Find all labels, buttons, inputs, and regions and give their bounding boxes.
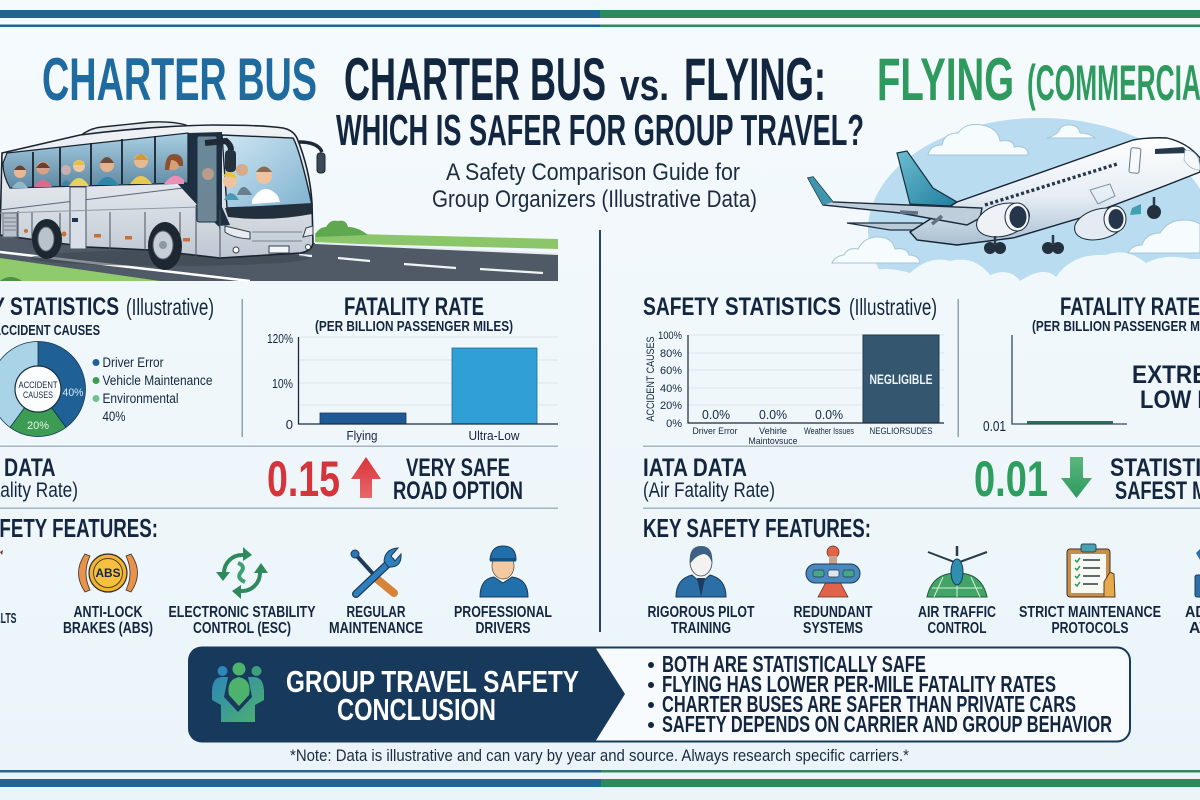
heading: charter bus: CHARTER BUS: [42, 46, 317, 113]
bottom border stripes: [0, 770, 1200, 787]
feature: strict maintenance protocols: [1019, 544, 1161, 637]
feature: air traffic control: AIR TRAFFIC: [918, 604, 996, 621]
donut chart: accident causes: 20%: [27, 420, 49, 432]
heading: flying safety statistics: STATISTICS: [725, 293, 841, 321]
bar chart: flying accident causes: 0.0%: [702, 408, 730, 422]
legend: accident causes: Driver Error: [102, 355, 164, 370]
feature: rigorous pilot training: [648, 546, 755, 637]
bar chart: bus fatality rate: 120%: [267, 331, 293, 346]
bar chart: flying accident causes: Vehirle: [759, 426, 787, 436]
heading: flying safety statistics: (Illustrative): [849, 294, 937, 320]
feature: rigorous pilot training: TRAINING: [671, 620, 731, 637]
feature: anti-lock brakes: BRAKES (ABS): [63, 620, 153, 637]
feature: anti-lock brakes: ANTI-LOCK: [74, 604, 143, 621]
footnote: *Note: Data is illustrative and can vary by year and source. Always research specific carriers.*: [290, 746, 909, 765]
bar chart: bus fatality rate: 0: [286, 417, 293, 432]
legend: accident causes: Vehicle Maintenance: [102, 373, 212, 388]
heading: flying key safety features: KEY SAFETY FEATURES:: [643, 513, 871, 543]
feature: professional drivers: [454, 546, 552, 637]
heading: flying: FLYING: [877, 46, 1014, 113]
bar chart: flying accident causes: 80%: [660, 348, 682, 360]
bar chart: flying fatality rate: 0.01: [983, 418, 1006, 435]
text block: conclusion bullets: [648, 651, 1112, 737]
feature: seat belts: [0, 550, 16, 627]
heading: bus fatality rate: (PER BILLION PASSENGER MILES): [315, 318, 513, 335]
bar chart: flying accident causes: 100%: [658, 330, 682, 342]
banner: conclusion heading: CONCLUSION: [337, 692, 496, 727]
stat: air fatality rate 0.01: 0.01: [974, 451, 1048, 507]
subtitle: [432, 159, 757, 213]
callout: very safe road option: VERY SAFE: [406, 454, 510, 482]
text block: conclusion bullets: BOTH ARE STATISTICALLY SAFE: [662, 651, 926, 677]
feature: strict maintenance protocols: STRICT MAINTENANCE: [1019, 604, 1161, 621]
feature: electronic stability control: [168, 547, 316, 637]
bar chart: flying accident causes: ACCIDENT CAUSES: [645, 336, 657, 422]
illustration: sky and clouds: [831, 118, 1200, 281]
bar chart: flying accident causes: 20%: [660, 400, 682, 412]
bar chart: flying accident causes: Weather Issues: [804, 426, 854, 436]
feature: air traffic control: [918, 546, 996, 637]
data source: bus: DATA: [4, 454, 56, 482]
heading: bus safety statistics: [0, 293, 214, 321]
heading: flying: [877, 46, 1200, 113]
illustration: road scene: [0, 221, 558, 281]
passengers: [12, 154, 184, 188]
feature: redundant systems: REDUNDANT: [794, 604, 873, 621]
heading: flying safety statistics: SAFETY: [643, 293, 719, 321]
callout: extremely low risk: [1132, 361, 1200, 414]
text block: conclusion bullets: FLYING HAS LOWER PER-MILE FATALITY RATES: [662, 671, 1056, 697]
title: FLYING:: [684, 46, 826, 113]
bar chart: flying accident causes: Maintovsuce: [748, 436, 798, 446]
door window: [197, 136, 217, 222]
bar chart: bus fatality rate: Ultra-Low: [468, 428, 520, 443]
heading: bus fatality rate: FATALITY RATE: [344, 293, 484, 321]
top border stripes: [0, 10, 1200, 27]
banner: conclusion heading: GROUP TRAVEL SAFETY: [286, 664, 579, 699]
feature: regular maintenance: REGULAR: [346, 604, 406, 621]
data source: air: (Air Fatality Rate): [643, 479, 775, 502]
banner: conclusion heading: [189, 647, 625, 742]
legend: accident causes: 40%: [102, 409, 126, 424]
feature: anti-lock brakes: ABS: [96, 568, 121, 580]
feature: professional drivers: DRIVERS: [476, 620, 531, 637]
bar chart: bus fatality rate: 10%: [272, 376, 293, 391]
heading: bus fatality rate: [315, 293, 513, 335]
bar chart: flying accident causes: NEGLIORSUDES: [870, 426, 932, 436]
illustration: airplane: [808, 138, 1200, 254]
feature: professional drivers: PROFESSIONAL: [454, 604, 552, 621]
title: [336, 46, 864, 155]
stat: bus fatality rate 0.15: 0.15: [267, 451, 340, 507]
centre divider: [599, 230, 601, 632]
bar chart: flying accident causes: Driver Error: [692, 426, 738, 436]
feature: regular maintenance: [329, 548, 423, 637]
bar chart: flying accident causes: 0.0%: [815, 408, 843, 422]
data source: air: IATA DATA: [643, 454, 747, 482]
bar chart: flying accident causes: 60%: [660, 365, 682, 377]
wheels: [32, 219, 62, 259]
bar chart: flying accident causes: 0%: [666, 418, 682, 430]
bar chart: flying accident causes: 0.0%: [759, 408, 787, 422]
bar chart: flying accident causes: [645, 330, 944, 446]
feature: redundant systems: SYSTEMS: [803, 620, 863, 637]
donut chart: accident causes: [0, 322, 100, 436]
feature: anti-lock brakes: [63, 554, 153, 637]
callout: statistically safest mode: [1110, 454, 1200, 505]
title: vs.: [620, 61, 669, 110]
callout: very safe road option: ROAD OPTION: [393, 477, 523, 505]
callout: very safe road option: [393, 454, 523, 505]
bar chart: flying fatality rate: [983, 335, 1127, 435]
arrow: down: [1061, 457, 1092, 498]
feature: advanced avionics: [1185, 549, 1200, 637]
donut chart: accident causes: ACCIDENT: [18, 380, 58, 391]
heading: flying fatality rate: [1032, 293, 1200, 335]
bar chart: bus fatality rate: [267, 331, 558, 443]
legend: accident causes: Environmental: [102, 391, 178, 406]
feature: regular maintenance: MAINTENANCE: [329, 620, 423, 637]
panel: conclusion: [189, 647, 1130, 742]
subtitle: Group Organizers (Illustrative Data): [432, 186, 757, 213]
donut chart: accident causes: CAUSES: [23, 390, 53, 401]
data source: air: [643, 454, 775, 502]
legend: accident causes: [92, 355, 212, 424]
icon: group of people: [212, 662, 264, 722]
heading: flying safety statistics: [643, 293, 937, 321]
feature: rigorous pilot training: RIGOROUS PILOT: [648, 604, 755, 621]
bar chart: flying accident causes: NEGLIGIBLE: [870, 372, 932, 387]
heading: bus safety statistics: STATISTICS: [10, 293, 119, 321]
bar chart: bus fatality rate: Flying: [346, 428, 378, 443]
arrow: up: [351, 457, 381, 498]
windshield: [222, 135, 312, 208]
illustration: charter bus: [0, 122, 325, 270]
feature: electronic stability control: CONTROL (ESC): [193, 620, 291, 637]
donut chart: accident causes: 40%: [62, 387, 84, 399]
title: CHARTER BUS: [344, 46, 606, 113]
heading: bus safety statistics: (Illustrative): [126, 294, 214, 320]
headlights and bumper: [225, 226, 250, 239]
feature: electronic stability control: ELECTRONIC STABILITY: [168, 604, 316, 621]
title: WHICH IS SAFER FOR GROUP TRAVEL?: [336, 106, 864, 155]
feature: strict maintenance protocols: PROTOCOLS: [1052, 620, 1129, 637]
feature: air traffic control: CONTROL: [928, 620, 987, 637]
feature: redundant systems: [794, 546, 873, 637]
data source: bus: [0, 454, 78, 502]
bar chart: flying accident causes: 40%: [660, 383, 682, 395]
subtitle: A Safety Comparison Guide for: [446, 159, 740, 186]
